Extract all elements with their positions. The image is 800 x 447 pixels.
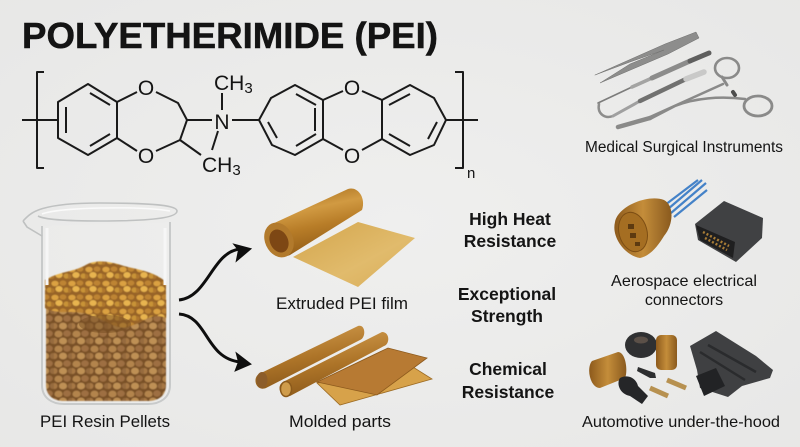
black fitting bbox=[618, 376, 648, 404]
middle ring bbox=[259, 85, 323, 155]
nitrogen and methyl labels bbox=[202, 72, 253, 179]
icon: aerospace connectors bbox=[614, 180, 763, 262]
blue wires bbox=[665, 180, 707, 217]
front sheet bbox=[317, 348, 427, 395]
lower pellets bbox=[46, 300, 166, 401]
label: automotive: Automotive under-the-hood bbox=[582, 414, 780, 431]
grommet hole bbox=[634, 336, 648, 344]
property: chemical resistance: Chemical bbox=[469, 359, 547, 379]
oxygen atom labels: O bbox=[344, 77, 360, 100]
label: pellets: PEI Resin Pellets bbox=[40, 413, 170, 431]
roll body bbox=[268, 189, 363, 256]
property: exceptional strength: Strength bbox=[471, 306, 543, 326]
arrow: pellets to film bbox=[179, 245, 250, 300]
chemical structure bbox=[22, 72, 478, 182]
nitrogen substituent bonds bbox=[180, 93, 222, 155]
oxygen atom labels: O bbox=[138, 77, 154, 100]
left benzene ring bbox=[58, 84, 117, 155]
nitrogen and methyl labels: 3 bbox=[232, 162, 241, 179]
repeat unit left bracket bbox=[37, 72, 44, 168]
left oxygen ring bonds bbox=[117, 92, 187, 151]
nitrogen and methyl labels: CH bbox=[202, 154, 232, 177]
rod end bbox=[256, 372, 268, 388]
label: medical: Medical Surgical Instruments bbox=[585, 139, 783, 156]
haemostat forceps bbox=[618, 58, 772, 127]
black connector bbox=[695, 201, 763, 262]
right oxygen ring bonds bbox=[323, 91, 382, 150]
repeat subscript n: n bbox=[467, 165, 475, 182]
roll end bbox=[259, 218, 299, 262]
property: exceptional strength: Exceptional bbox=[458, 284, 556, 304]
nitrogen and methyl labels: N bbox=[214, 111, 230, 134]
small black pin bbox=[637, 367, 656, 378]
solid rod bbox=[255, 326, 364, 389]
label: film: Extruded PEI film bbox=[276, 295, 408, 313]
glass wall bbox=[42, 222, 170, 404]
gold connector face bbox=[614, 209, 652, 255]
back sheet bbox=[317, 367, 432, 405]
property: high heat resistance: High Heat bbox=[469, 209, 551, 229]
tweezers bbox=[595, 32, 699, 83]
black grommet bbox=[625, 332, 657, 358]
label: molded: Molded parts bbox=[289, 413, 391, 431]
icon: surgical instruments bbox=[595, 32, 772, 127]
repeat unit right bracket bbox=[455, 72, 463, 168]
black connector face bbox=[696, 225, 735, 258]
icon: PEI film roll bbox=[259, 189, 415, 287]
brass screws bbox=[650, 380, 686, 396]
oxygen atom labels: O bbox=[344, 145, 360, 168]
roll core bbox=[266, 226, 292, 256]
gold pins bbox=[628, 224, 640, 246]
tube end bbox=[280, 382, 292, 396]
connector pins bbox=[703, 232, 729, 250]
glass highlight bbox=[47, 228, 165, 285]
nitrogen and methyl labels: CH bbox=[214, 72, 244, 95]
beaker rim bbox=[23, 203, 177, 236]
rim inner shine bbox=[42, 208, 170, 214]
tube bbox=[279, 332, 388, 396]
icon: automotive components bbox=[589, 331, 773, 404]
black module bbox=[690, 331, 773, 397]
gold cylinder bbox=[589, 352, 626, 388]
gold knob bbox=[656, 335, 677, 370]
property: high heat resistance: Resistance bbox=[464, 231, 556, 251]
arrow: pellets to molded parts bbox=[179, 314, 250, 370]
module plug bbox=[696, 368, 725, 396]
dark pellet shading bbox=[79, 315, 131, 333]
film sheet bbox=[293, 222, 415, 287]
backbone bonds bbox=[22, 119, 478, 121]
label: aerospace: Aerospace electrical bbox=[611, 273, 757, 290]
probe tool bbox=[598, 53, 709, 103]
upper golden pellets bbox=[45, 261, 166, 328]
oxygen atom labels bbox=[138, 77, 360, 168]
icon: molded parts bbox=[255, 326, 432, 405]
gold connector bbox=[614, 198, 672, 258]
label: aerospace bbox=[611, 273, 757, 309]
label: aerospace: connectors bbox=[645, 292, 723, 309]
nitrogen and methyl labels: 3 bbox=[244, 80, 253, 97]
icon: beaker with pellets bbox=[23, 203, 177, 404]
right ring bbox=[382, 85, 446, 155]
property: chemical resistance: Resistance bbox=[462, 382, 554, 402]
curved elevator tool bbox=[599, 72, 704, 117]
oxygen atom labels: O bbox=[138, 145, 154, 168]
title: POLYETHERIMIDE (PEI) bbox=[22, 15, 438, 56]
module ribs bbox=[700, 345, 756, 380]
